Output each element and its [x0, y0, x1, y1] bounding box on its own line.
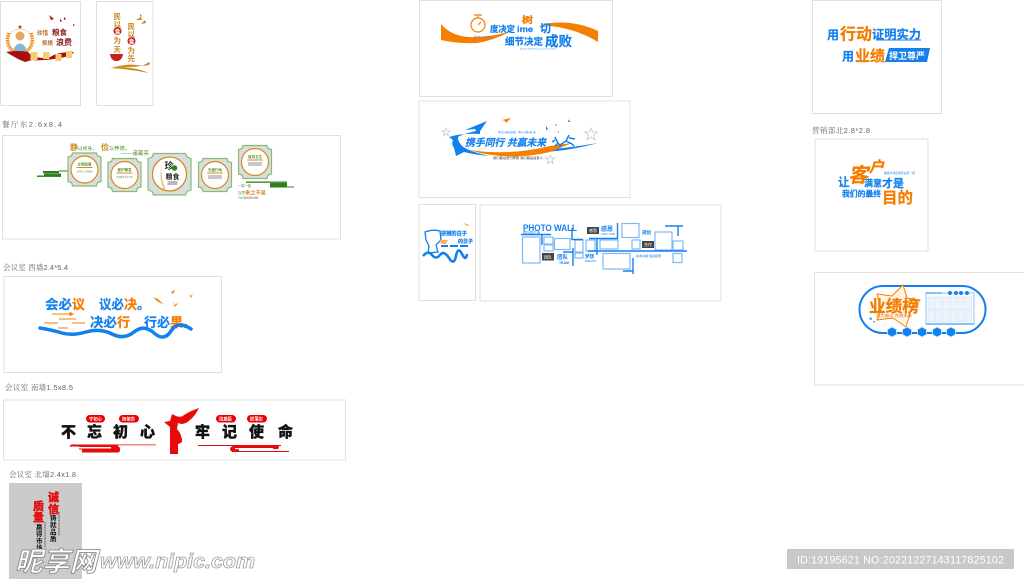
panel: meeting slogan	[4, 276, 222, 372]
orange ribbon right	[540, 23, 598, 42]
black column left: 得	[36, 529, 43, 538]
quote heading: 以养德。	[109, 144, 130, 152]
line 1: 用	[827, 28, 839, 42]
proverb: 当思	[238, 190, 245, 195]
red calligraphy quality	[33, 499, 44, 524]
board subtitle: 实力奋斗 共创未来	[876, 312, 912, 318]
tile 2: 珍惜粮食 爱护公物	[116, 175, 132, 179]
slogan right: 使	[249, 423, 264, 441]
tile 1: 文明就餐	[78, 162, 92, 166]
proverb	[238, 183, 266, 200]
right green brush line	[246, 182, 294, 188]
birds	[136, 14, 146, 24]
panel: customer satisfaction	[815, 139, 928, 251]
icon: stopwatch	[471, 15, 485, 32]
slogan	[838, 159, 913, 207]
slogan line 1: 议必	[99, 297, 124, 312]
small tagline below: 我们都在努力奔跑 我们都是追梦人	[493, 155, 543, 160]
vertical slogan left: 民	[114, 12, 122, 21]
panel: attitude decides wall	[420, 0, 612, 96]
heading: cherish grain: 粮食	[52, 27, 67, 37]
red calligraphy integrity: 信	[48, 502, 59, 516]
section labels: 感恩	[601, 225, 613, 233]
black column left: 赢	[36, 522, 43, 531]
slogan line 2: 决必	[90, 315, 117, 330]
handwritten text	[441, 230, 473, 245]
panel: attitude decides wall: Details determine success or failure	[520, 48, 557, 50]
panel: fist slogan	[419, 204, 476, 300]
line 1: 证明实力	[872, 26, 921, 42]
slogan line 1	[45, 297, 150, 312]
slogan left: 心	[140, 423, 155, 441]
image id bar	[787, 549, 1014, 569]
tile 5: 保持卫生	[248, 154, 262, 159]
title: PHOTO WALL	[523, 223, 577, 233]
handwritten text: 的日子	[458, 238, 473, 245]
dark labels: 团队	[544, 254, 552, 260]
slogan right: 记	[222, 424, 237, 441]
black column right: 铸	[50, 513, 57, 522]
line 1: 行动	[840, 26, 872, 44]
dark labels: 合作	[644, 241, 652, 247]
vertical slogan right: 民	[128, 22, 136, 31]
blue rising line	[510, 143, 598, 153]
caption: meeting room west: 会议室 西墙2.4*5.4	[3, 262, 68, 272]
vertical slogan left: 食	[114, 28, 121, 36]
slogan line 2: 成败	[545, 33, 572, 49]
tile 2: 爱护粮食	[118, 167, 132, 172]
panel: photo wall	[480, 205, 721, 301]
heading: cherish grain	[37, 27, 72, 47]
red pills: 担使命	[122, 416, 136, 423]
section labels	[557, 225, 661, 265]
underline	[876, 40, 921, 41]
blue connector lines	[521, 223, 687, 274]
icon: fist outline	[425, 230, 441, 253]
slogan line 2	[505, 33, 572, 49]
vertical slogan right	[128, 22, 136, 63]
slogan right	[195, 423, 293, 441]
red pills: 找差距	[219, 416, 233, 423]
black column left: 场	[36, 543, 43, 552]
dark labels	[542, 227, 654, 260]
blue paper plane	[465, 121, 487, 134]
quote heading: ——诸葛亮	[121, 149, 149, 157]
tile 4: 光盘行动	[208, 167, 222, 172]
red pills	[86, 415, 267, 423]
slogan right: 命	[278, 423, 293, 441]
red calligraphy quality: 质	[33, 499, 44, 513]
section labels: 团队	[557, 253, 568, 261]
caption: meeting room north: 会议室 北墙2.4x1.8	[9, 469, 76, 479]
orange paper plane	[502, 118, 511, 123]
panel: action proves strength	[812, 0, 942, 114]
tile 3: central grain tile: 珍	[164, 160, 174, 171]
black column left: 市	[36, 536, 43, 545]
icon: speed arrows	[44, 312, 85, 328]
red flag column	[164, 408, 199, 454]
slogan left	[61, 423, 155, 441]
red calligraphy integrity: 诚	[48, 490, 59, 504]
section labels: TEAM	[559, 261, 569, 265]
slogan line 2: 行	[117, 315, 130, 330]
vertical slogan left	[114, 12, 122, 54]
panel: canteen wall	[2, 136, 340, 239]
slogan line 1	[490, 22, 551, 35]
panel: performance board	[814, 272, 1024, 385]
section labels: DREAM	[585, 259, 597, 263]
proverb: 半丝半缕恒念物力维艰	[238, 196, 259, 200]
slogan line 1: 度决定	[490, 24, 515, 34]
red calligraphy quality: 量	[33, 511, 44, 524]
icon: rice bowl	[110, 54, 123, 61]
slogan line 1: 决	[124, 297, 137, 312]
birds	[546, 119, 570, 133]
orange ribbon left	[441, 24, 511, 43]
slogan line 1: 议	[72, 297, 85, 312]
top table badges	[948, 291, 969, 295]
slogan line 2	[90, 315, 196, 330]
caption: marketing north: 营销部北2.8*2.8	[812, 125, 870, 135]
slogan left: 不	[61, 424, 76, 441]
handwritten text: 拼搏的日子	[441, 230, 467, 238]
line 2	[842, 47, 885, 65]
panel: cherish grain wall	[0, 2, 80, 106]
tile 2	[108, 158, 141, 192]
tile 1	[68, 153, 101, 186]
slogan line 2: 。	[183, 315, 196, 330]
vertical slogan right: 食	[128, 38, 135, 46]
photo frames	[522, 224, 683, 269]
small captions: Attitude is everything	[474, 35, 492, 38]
slogan line 1: 会必	[45, 297, 72, 312]
slogan: 户	[869, 159, 885, 176]
panel: hand in hand wall	[419, 101, 630, 198]
orange dots	[440, 223, 470, 244]
slogan line 2: 果	[170, 315, 183, 330]
watermark	[15, 547, 255, 577]
slogan left: 初	[113, 423, 128, 441]
slogan: 目的	[882, 189, 913, 207]
quote heading: 俭	[101, 142, 109, 152]
panel: food is heaven wall	[96, 2, 153, 106]
decorative birds	[49, 15, 75, 26]
red rules left	[70, 444, 156, 452]
slogan line 1: 切	[540, 22, 551, 35]
black column left	[36, 522, 43, 552]
left green brush line	[37, 170, 69, 177]
heading: cherish grain: 拒绝	[42, 39, 53, 47]
vertical slogan left: 以	[114, 20, 122, 29]
black column right	[50, 513, 57, 543]
orange star	[877, 285, 920, 327]
tile 4	[198, 158, 232, 192]
slogan left: 忘	[87, 423, 102, 441]
heading: cherish grain: 浪费	[56, 37, 72, 47]
quote heading: 以修身，	[78, 145, 97, 152]
hexagon badges	[888, 327, 956, 337]
slogan line 1: ime	[517, 25, 534, 34]
heading: cherish grain: 珍惜	[37, 29, 48, 37]
panel: never forget mission banner	[4, 400, 346, 460]
small tagline top: 用心做未来	[518, 130, 537, 134]
watermark: www.nipic.com	[100, 551, 255, 573]
slogan: 让	[838, 175, 850, 189]
slogan line 2: 细节决定	[505, 36, 543, 48]
board title: 业绩榜	[869, 296, 919, 316]
red pills: 抓落实	[250, 416, 264, 423]
section labels: GRATITUDE	[601, 233, 615, 236]
vertical slogan right: 为	[128, 45, 135, 55]
black column right: 品	[50, 528, 57, 536]
wave	[423, 250, 467, 262]
slogan: 才是	[882, 176, 904, 190]
white inset right	[235, 448, 273, 449]
thin text lines	[45, 512, 59, 547]
stadium outline	[860, 286, 986, 333]
section labels: 追求卓越 挑战极限	[636, 253, 661, 258]
image id bar: ID:19195621 NO:20221227143117825102	[797, 554, 1004, 566]
lower rule right	[232, 451, 289, 452]
vertical slogan left: 为	[114, 35, 121, 45]
vertical slogan right: 以	[128, 30, 136, 39]
watermark: 昵享网	[15, 547, 101, 577]
red calligraphy integrity	[48, 490, 59, 516]
tile 1: 文明礼让 尊师爱幼	[76, 170, 92, 174]
tiny tagline: 做客户满意的专业第一线	[884, 171, 915, 175]
red pills: 守初心	[89, 416, 103, 423]
slogan: 客	[848, 164, 871, 187]
red rules right	[198, 445, 281, 452]
birds	[153, 290, 193, 307]
red ribbon with badges	[6, 51, 74, 62]
quote heading: 静	[70, 142, 78, 152]
line 2: 用	[842, 50, 854, 64]
tile 3: central grain tile	[148, 154, 191, 195]
small tagline top: 用心做品质	[498, 130, 517, 134]
blue badge: 捍卫尊严	[889, 50, 925, 61]
blue dots	[869, 317, 875, 323]
title: 团队照片墙	[523, 230, 540, 234]
ranking table	[926, 293, 974, 324]
vertical slogan left: 天	[114, 45, 122, 54]
white inset left	[78, 447, 111, 448]
blue swoosh with arrow	[449, 130, 490, 156]
golden swoosh	[101, 62, 150, 73]
black column right: 就	[50, 520, 57, 529]
small blue pills	[441, 245, 468, 247]
section labels: 梦想	[585, 253, 594, 260]
slogan right: 牢	[195, 424, 210, 441]
vertical slogan right: 先	[128, 53, 136, 63]
orange swoosh	[470, 143, 572, 156]
caption: canteen east: 餐厅东2.6x8.4	[2, 119, 62, 129]
caption: meeting room south: 会议室 南墙1.5x8.5	[5, 382, 73, 392]
black column right: 质	[50, 534, 57, 543]
slogan line 2: 行必	[144, 315, 170, 330]
small orange figure: 树	[522, 14, 533, 25]
line 1	[827, 26, 921, 44]
tile 3: central grain tile: 粮食	[166, 172, 180, 181]
line 2: 业绩	[855, 47, 885, 65]
slogan: 携手同行 共赢未来	[465, 137, 547, 149]
blue wave	[40, 325, 191, 337]
proverb: 来之不易	[245, 188, 266, 196]
panel: integrity and quality gray wall	[9, 483, 82, 579]
slogan line 1: 。	[137, 297, 150, 312]
slogan: 满意	[864, 178, 882, 188]
gray stars	[442, 128, 598, 164]
tile 5	[238, 146, 272, 178]
section labels: 规划	[642, 229, 651, 236]
quote heading	[70, 142, 149, 157]
icon: farmer portrait with wheat wreath	[8, 26, 32, 54]
proverb: 一粥一饭	[238, 183, 252, 188]
runners	[552, 135, 575, 147]
slogan: 我们的最终	[842, 188, 881, 198]
small tagline top	[498, 130, 537, 134]
dark labels: 感恩	[589, 227, 597, 233]
